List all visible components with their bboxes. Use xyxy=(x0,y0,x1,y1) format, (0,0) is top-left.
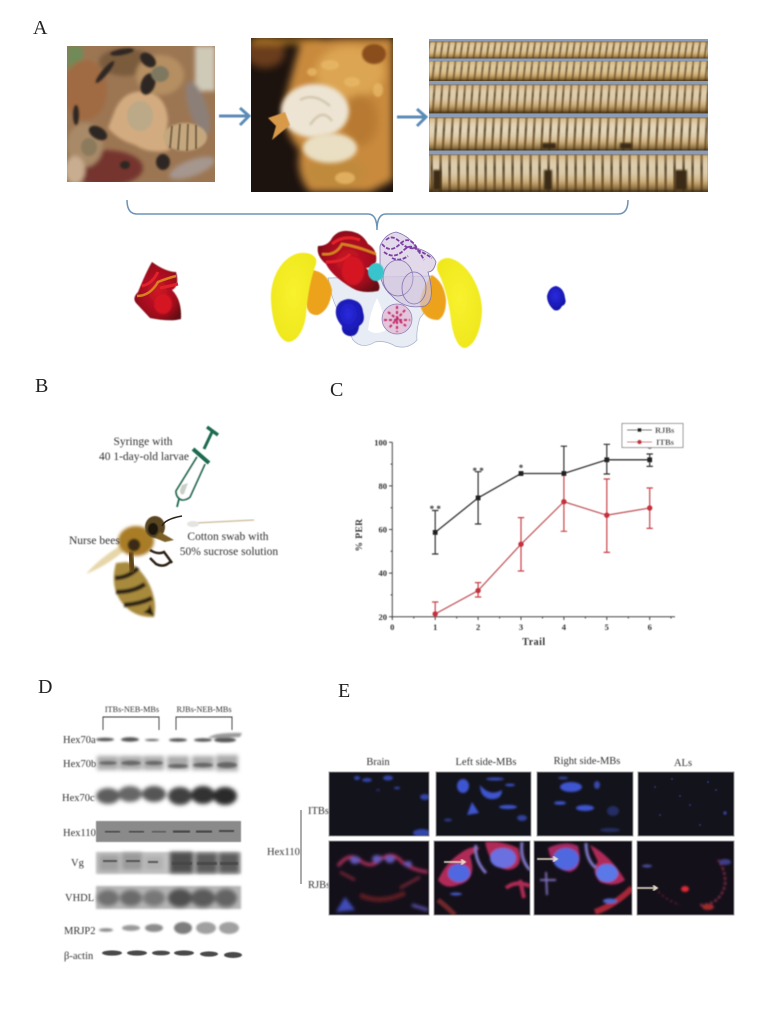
blot: row labels: β-actin xyxy=(64,951,94,962)
text: cotton swab caption: Cotton swab with xyxy=(187,531,269,543)
western blot panel xyxy=(62,705,242,962)
chart: x axis tick labels xyxy=(390,622,652,632)
micrograph: ITBs antennal lobes xyxy=(638,772,734,836)
series: RJBs xyxy=(432,444,653,554)
micrograph: ITBs left side mushroom bodies xyxy=(436,772,531,836)
text: Hex110 row label: Hex110 xyxy=(267,847,300,858)
chart: x axis tick labels: 4 xyxy=(562,622,567,632)
text: nurse bees caption: Nurse bees xyxy=(69,535,120,547)
brain: right mushroom body wireframe xyxy=(380,232,436,307)
text: syringe caption: Syringe with xyxy=(113,436,173,448)
blot: row labels: VHDL xyxy=(65,893,94,904)
label: panel A: A xyxy=(33,17,48,39)
bracket: links photos to brain xyxy=(127,200,628,230)
text: ITBs row label: ITBs xyxy=(308,806,329,817)
text: cotton swab caption xyxy=(180,531,278,558)
chart: x axis title: Trail xyxy=(522,637,546,648)
chart: x axis tick labels: 6 xyxy=(648,622,652,632)
text: column headings: Left side-MBs xyxy=(456,757,516,768)
blot: group headings and brackets xyxy=(103,705,232,730)
chart: y axis tick labels: 40 xyxy=(378,568,387,578)
chart: axes xyxy=(389,442,675,620)
label: panel B: B xyxy=(35,375,48,397)
icon: cotton swab xyxy=(187,520,254,527)
blot: MRJP2 bands xyxy=(99,922,239,934)
blot: beta-actin bands xyxy=(102,950,242,958)
blot: row labels: Vg xyxy=(71,858,85,869)
chart: y axis tick labels xyxy=(374,438,387,622)
chart: significance marks: * * xyxy=(472,466,484,476)
chart: significance marks xyxy=(430,444,652,514)
bee: legs xyxy=(150,550,172,566)
chart: y axis tick labels: 100 xyxy=(374,438,387,448)
photo: worker bees around a queen cell xyxy=(63,46,217,186)
blot: row labels: Hex70c xyxy=(62,793,95,804)
chart: y axis title: % PER xyxy=(355,519,365,551)
text: cotton swab caption: 50% sucrose solution xyxy=(180,546,278,558)
bracket: row group line xyxy=(300,810,302,884)
bee: abdomen xyxy=(114,562,155,617)
chart: x axis tick labels: 5 xyxy=(605,622,609,632)
icon: isolated mushroom body xyxy=(134,262,181,320)
micrograph: RJBs antennal lobes xyxy=(637,841,734,915)
blot: Hex70c bands xyxy=(96,786,237,805)
blot: VHDL bands xyxy=(96,886,241,909)
micrograph: ITBs right side mushroom bodies xyxy=(537,772,633,836)
blot: row labels xyxy=(62,735,96,962)
chart: significance marks: * * xyxy=(430,504,441,514)
chart: legend xyxy=(622,424,683,448)
chart: significance marks: * xyxy=(647,444,652,454)
micrograph: ITBs brain xyxy=(329,772,431,837)
text: column headings xyxy=(366,756,692,769)
text: column headings: Right side-MBs xyxy=(554,756,620,767)
arrow: first to second photo xyxy=(219,108,249,125)
arrow: antennal lobes RJBs callout xyxy=(637,886,657,890)
icon: syringe xyxy=(176,427,218,507)
line chart: % PER by trail xyxy=(355,424,683,648)
text: RJBs row label: RJBs xyxy=(308,880,330,891)
text: syringe caption xyxy=(99,436,189,463)
micrograph: RJBs right side mushroom bodies xyxy=(534,841,632,915)
blot: row labels: Hex70b xyxy=(63,759,96,770)
brain: blue antennal lobe xyxy=(336,299,364,336)
blot: row labels: Hex110 xyxy=(63,828,96,839)
chart: y axis tick labels: 60 xyxy=(378,524,387,534)
brain: left orange lobe xyxy=(306,270,332,315)
brain: central opening xyxy=(368,298,386,333)
bee: thorax xyxy=(118,526,154,556)
blot: Hex110 bands xyxy=(96,821,241,842)
blot: Vg bands xyxy=(96,852,241,874)
series: ITBs xyxy=(432,472,653,617)
label: panel D: D xyxy=(38,676,52,698)
brain: left yellow optic lobe xyxy=(271,253,316,342)
chart: x axis tick labels: 2 xyxy=(476,622,480,632)
brain: translucent central body xyxy=(328,276,433,347)
bee: antenna xyxy=(162,516,182,526)
chart: y axis tick labels: 80 xyxy=(378,481,387,491)
arrow: second to third photo xyxy=(397,109,426,126)
brain: left mushroom body in red xyxy=(318,231,380,292)
chart: legend: RJBs xyxy=(655,425,675,435)
bee: wing xyxy=(86,546,124,574)
chart: x axis tick labels: 3 xyxy=(519,622,523,632)
arrow: right side RJBs callout xyxy=(537,856,557,862)
chart: significance marks: * xyxy=(519,463,524,473)
text: column headings: Brain xyxy=(366,757,390,768)
chart: x axis tick labels: 1 xyxy=(433,622,437,632)
photo: opened queen cell with royal jelly xyxy=(245,36,393,192)
icon: nurse bee xyxy=(86,516,182,617)
text: syringe caption: 40 1-day-old larvae xyxy=(99,451,189,463)
bee: waist and body link xyxy=(130,552,133,572)
photo: rows of queen cell cups xyxy=(429,39,708,192)
blot: Hex70a bands xyxy=(96,733,242,742)
micrograph: RJBs brain xyxy=(329,841,429,915)
arrow: left side RJBs callout xyxy=(444,860,465,864)
chart: legend: ITBs xyxy=(656,437,675,447)
icon: isolated antennal lobe xyxy=(547,286,566,310)
blot: row labels: Hex70a xyxy=(63,735,96,746)
text: column headings: ALs xyxy=(674,758,692,769)
brain: right orange lobe xyxy=(420,275,446,320)
chart: x axis tick labels: 0 xyxy=(390,622,394,632)
blot: group headings and brackets: RJBs-NEB-MBs xyxy=(176,705,232,714)
label: panel E: E xyxy=(338,680,350,702)
brain: right yellow optic lobe xyxy=(437,258,482,348)
blot: row labels: MRJP2 xyxy=(64,926,96,937)
brain: 3D honeybee brain model xyxy=(271,231,482,348)
label: panel C: C xyxy=(330,379,343,401)
brain: cyan central complex xyxy=(368,263,384,281)
blot: group headings and brackets: ITBs-NEB-MBs xyxy=(105,705,159,714)
blot: Hex70b bands xyxy=(97,755,238,771)
micrograph: RJBs left side mushroom bodies xyxy=(434,841,530,915)
chart: y axis tick labels: 20 xyxy=(378,612,387,622)
brain: pink wireframe antennal lobe xyxy=(382,304,412,334)
bee: head xyxy=(145,516,165,538)
